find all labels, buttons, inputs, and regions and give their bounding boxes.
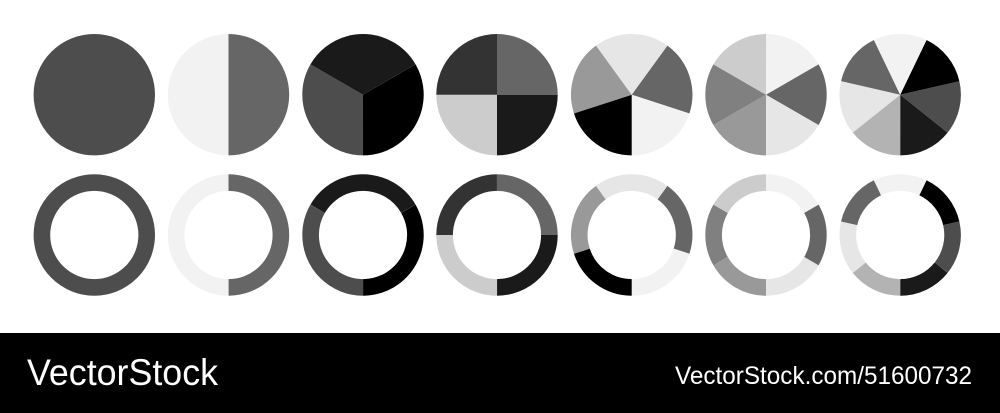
ring: 2 segments xyxy=(176,183,281,287)
pie: 3 segments xyxy=(322,53,404,136)
pie: 1 segment xyxy=(64,64,125,125)
pie: 6 segments xyxy=(725,53,807,136)
ring: 7 segments xyxy=(827,161,974,309)
ring: 3 segments xyxy=(291,163,435,307)
pie: 5 segments xyxy=(589,52,674,137)
footer bar xyxy=(0,333,1000,413)
pie: 4 segments xyxy=(467,64,527,125)
ring: 4 segments xyxy=(445,183,549,287)
row: pie charts xyxy=(64,52,943,137)
pie: 2 segments xyxy=(198,64,259,125)
image id text: VectorStock.com/51600732 xyxy=(675,362,972,390)
ring: 5 segments xyxy=(559,162,705,308)
ring: 1 segment xyxy=(42,183,147,287)
row: ring charts xyxy=(42,161,974,309)
ring: 6 segments xyxy=(694,163,838,307)
pie: 7 segments xyxy=(858,52,943,137)
brand logo text: VectorStock xyxy=(27,351,218,393)
